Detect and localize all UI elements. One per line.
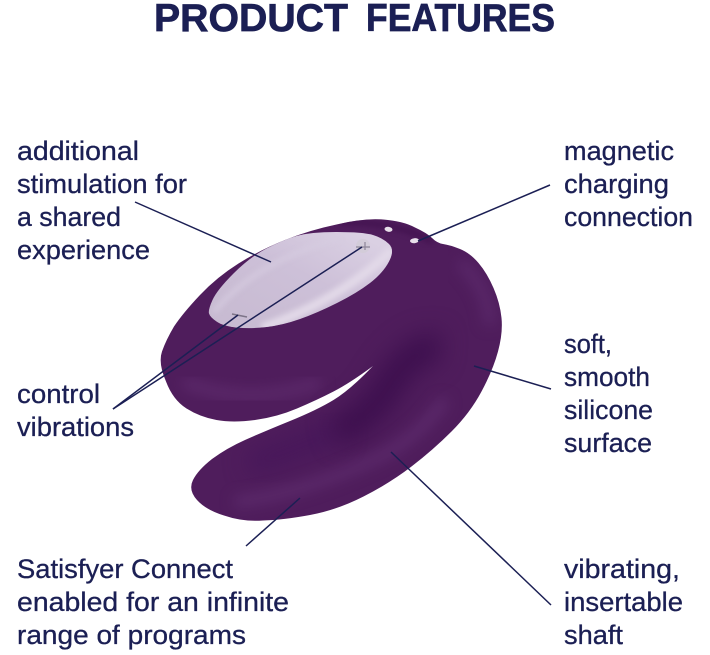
label: magnetic charging: magnetic xyxy=(564,136,674,166)
plus button xyxy=(356,239,370,253)
label: silicone surface: surface xyxy=(564,428,652,458)
label: silicone surface: silicone xyxy=(564,395,653,425)
label: control vibrations xyxy=(17,379,134,442)
label: additional stimulation: experience xyxy=(17,235,150,265)
label: silicone surface xyxy=(564,329,653,458)
label: magnetic charging xyxy=(564,136,693,232)
label: magnetic charging: connection xyxy=(564,202,693,232)
label: insertable shaft: insertable xyxy=(564,587,683,617)
label: control vibrations: control xyxy=(17,379,100,409)
label: silicone surface: smooth xyxy=(564,362,650,392)
label: additional stimulation: additional xyxy=(17,136,139,166)
label: Satisfyer Connect: Satisfyer Connect xyxy=(17,554,233,584)
label: insertable shaft xyxy=(564,554,683,650)
label: Satisfyer Connect: enabled for an infinite xyxy=(17,587,289,617)
control panel xyxy=(209,232,392,328)
charging contacts xyxy=(384,226,419,244)
label: Satisfyer Connect xyxy=(17,554,289,650)
minus button xyxy=(232,314,247,317)
leader lines xyxy=(113,185,551,605)
label: additional stimulation: a shared xyxy=(17,202,121,232)
label: control vibrations: vibrations xyxy=(17,412,134,442)
label: insertable shaft: vibrating, xyxy=(564,554,680,584)
product: purple device xyxy=(161,219,502,521)
label: silicone surface: soft, xyxy=(564,329,612,359)
label: Satisfyer Connect: range of programs xyxy=(17,620,246,650)
label: magnetic charging: charging xyxy=(564,169,669,199)
label: additional stimulation: stimulation for xyxy=(17,169,187,199)
label: additional stimulation xyxy=(17,136,187,265)
label: insertable shaft: shaft xyxy=(564,620,623,650)
title xyxy=(154,0,555,40)
